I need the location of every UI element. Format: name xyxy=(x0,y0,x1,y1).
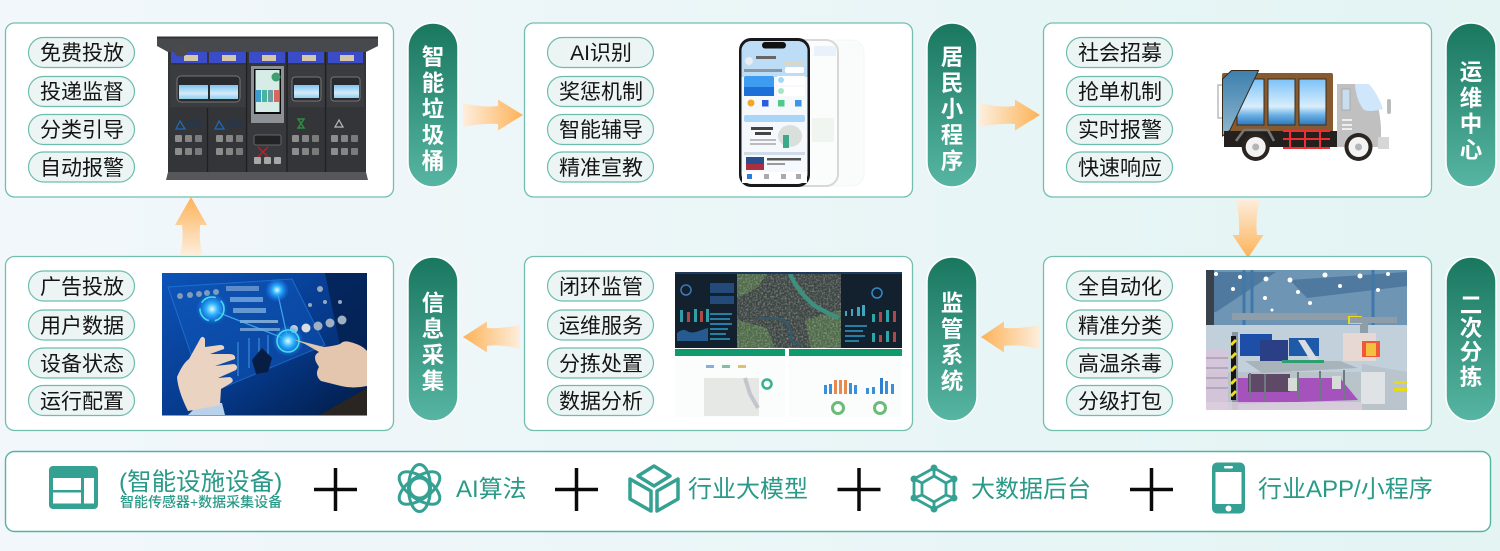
image: touch screen with hands xyxy=(162,273,367,416)
sorting tags xyxy=(1066,271,1172,416)
operations tags: 快速响应 xyxy=(1078,157,1162,180)
panel: smart bin xyxy=(6,23,394,197)
side label: mini program: 民 xyxy=(941,71,963,96)
side label: mini program: 小 xyxy=(941,97,964,122)
side label: monitoring system: 系 xyxy=(941,343,963,368)
operations tags xyxy=(1066,38,1172,182)
side label: operations center: 维 xyxy=(1460,86,1482,111)
arrow: sorting to monitoring xyxy=(981,322,1040,352)
sorting tags: 精准分类 xyxy=(1078,315,1162,338)
sorting tags: 分级打包 xyxy=(1078,390,1162,414)
side label: information collection xyxy=(408,257,458,421)
plus sign xyxy=(555,468,598,511)
bin tags: 自动报警 xyxy=(40,157,124,180)
plus sign xyxy=(838,468,880,511)
heading: smart facility equipment xyxy=(119,468,282,510)
side label: operations center: 运 xyxy=(1460,60,1483,85)
arrow: mini program to operations xyxy=(980,100,1040,130)
side label: smart bin: 圾 xyxy=(422,123,444,148)
data tags: 用户数据 xyxy=(40,315,124,338)
mini program tags: 精准宣教 xyxy=(559,157,643,180)
panel: mini program xyxy=(524,23,912,197)
side label: secondary sorting xyxy=(1446,257,1496,421)
side label: smart bin: 桶 xyxy=(422,149,444,174)
icon: mobile phone xyxy=(1212,462,1245,514)
mini program tags xyxy=(548,38,654,182)
label: industry app and mini program: 行业APP/小程序 xyxy=(1258,476,1433,503)
side label: secondary sorting: 二 xyxy=(1460,293,1482,318)
panel: bottom technology bar xyxy=(6,452,1490,532)
icon: AI atom xyxy=(394,464,445,512)
icon: facility layout xyxy=(49,466,98,509)
side label: smart bin: 智 xyxy=(422,45,444,70)
panel: secondary sorting xyxy=(1044,256,1432,430)
panel: monitoring system xyxy=(524,256,912,430)
bin tags: 分类引导 xyxy=(40,119,124,142)
label: AI algorithm: AI算法 xyxy=(456,476,527,503)
side label: mini program xyxy=(927,23,977,187)
sorting tags: 高温杀毒 xyxy=(1078,353,1162,376)
side label: monitoring system: 监 xyxy=(941,291,963,316)
side label: secondary sorting: 拣 xyxy=(1460,365,1482,390)
side label: information collection: 集 xyxy=(422,369,444,394)
plus sign xyxy=(1130,468,1173,511)
side label: mini program: 居 xyxy=(941,45,963,70)
side label: secondary sorting: 次 xyxy=(1460,316,1482,341)
panel: operations center xyxy=(1044,23,1432,197)
arrow: bin to mini program xyxy=(463,100,523,130)
icon: cube model xyxy=(630,466,678,511)
image: phone mockup xyxy=(739,38,864,187)
side label: information collection: 信 xyxy=(422,291,444,316)
label: big data backend: 大数据后台 xyxy=(971,476,1091,503)
image: dashboard screens xyxy=(675,272,902,417)
side label: operations center: 中 xyxy=(1460,112,1482,137)
side label: monitoring system: 统 xyxy=(941,369,963,394)
bin tags: 投递监督 xyxy=(40,81,124,104)
side label: smart bin xyxy=(408,23,458,187)
operations tags: 实时报警 xyxy=(1078,119,1162,142)
arrow: operations to sorting xyxy=(1232,199,1264,258)
data tags: 设备状态 xyxy=(40,353,124,376)
side label: mini program: 序 xyxy=(941,149,963,174)
side label: monitoring system: 管 xyxy=(941,317,963,342)
mini program tags: AI识别 xyxy=(570,42,632,65)
monitoring tags xyxy=(548,271,654,416)
side label: monitoring system xyxy=(927,257,977,421)
side label: operations center: 心 xyxy=(1460,138,1483,163)
arrow: monitoring to collection xyxy=(463,322,520,352)
image: truck xyxy=(1218,70,1391,161)
operations tags: 抢单机制 xyxy=(1078,81,1162,104)
side label: mini program: 程 xyxy=(941,123,963,148)
mini program tags: 奖惩机制 xyxy=(559,81,643,104)
side label: information collection: 息 xyxy=(422,316,444,342)
panel: advertising and data xyxy=(6,256,394,430)
monitoring tags: 闭环监管 xyxy=(559,276,643,299)
monitoring tags: 运维服务 xyxy=(559,315,643,338)
label: industry large model: 行业大模型 xyxy=(688,476,808,503)
operations tags: 社会招募 xyxy=(1078,42,1162,65)
bin tags xyxy=(28,38,134,182)
side label: smart bin: 垃 xyxy=(422,96,444,122)
image: smart bin cabinet xyxy=(157,36,378,180)
heading: smart facility equipment: 智能传感器+数据采集设备 xyxy=(120,494,282,510)
bin tags: 免费投放 xyxy=(40,42,124,65)
side label: secondary sorting: 分 xyxy=(1460,340,1482,365)
monitoring tags: 分拣处置 xyxy=(559,353,643,376)
data tags: 广告投放 xyxy=(40,276,124,299)
image: sorting factory xyxy=(1206,270,1407,410)
side label: information collection: 采 xyxy=(422,343,444,368)
sorting tags: 全自动化 xyxy=(1078,276,1162,299)
monitoring tags: 数据分析 xyxy=(559,390,643,414)
side label: operations center xyxy=(1446,23,1496,187)
heading: smart facility equipment: (智能设施设备) xyxy=(119,468,282,496)
icon: big data network xyxy=(910,464,958,512)
data tags xyxy=(28,271,134,416)
plus sign xyxy=(314,468,357,511)
mini program tags: 智能辅导 xyxy=(559,119,643,142)
data tags: 运行配置 xyxy=(40,390,124,414)
arrow: up to smart bin xyxy=(175,197,207,255)
side label: smart bin: 能 xyxy=(422,71,444,96)
